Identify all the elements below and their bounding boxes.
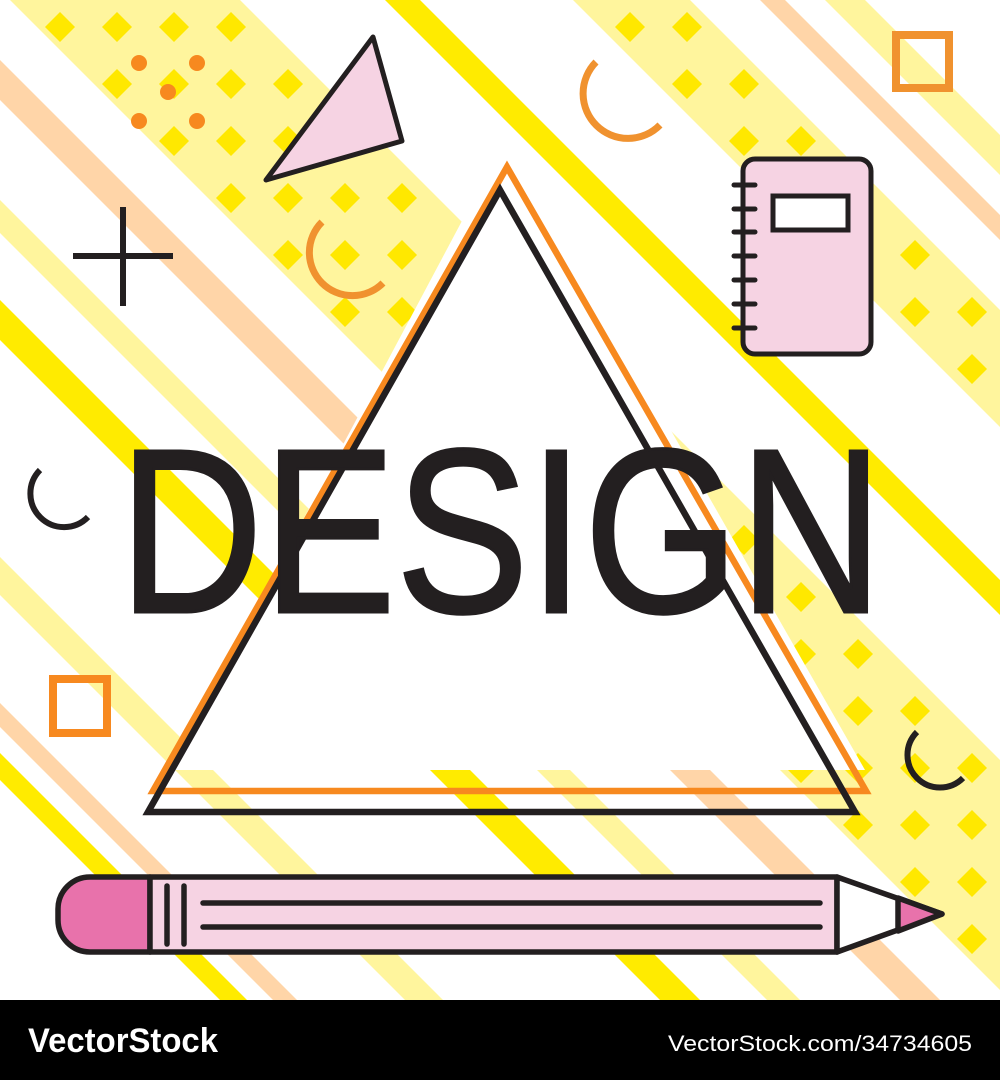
black arc right	[907, 732, 963, 788]
pink triangle	[266, 37, 402, 180]
footer bar: VectorStock.com/34734605	[668, 1031, 972, 1056]
orange dots	[131, 55, 205, 129]
title DESIGN: DESIGN	[119, 400, 883, 662]
footer bar	[0, 1000, 1000, 1080]
orange arc top	[583, 62, 660, 138]
orange arc left	[309, 222, 383, 296]
plus sign	[73, 207, 173, 306]
pencil icon	[58, 877, 942, 952]
big triangle outline	[148, 167, 866, 812]
footer bar: VectorStock	[28, 1022, 218, 1060]
orange square left	[53, 679, 107, 733]
notebook icon	[734, 159, 871, 354]
orange square top right	[896, 35, 949, 88]
black arc left	[30, 470, 88, 527]
